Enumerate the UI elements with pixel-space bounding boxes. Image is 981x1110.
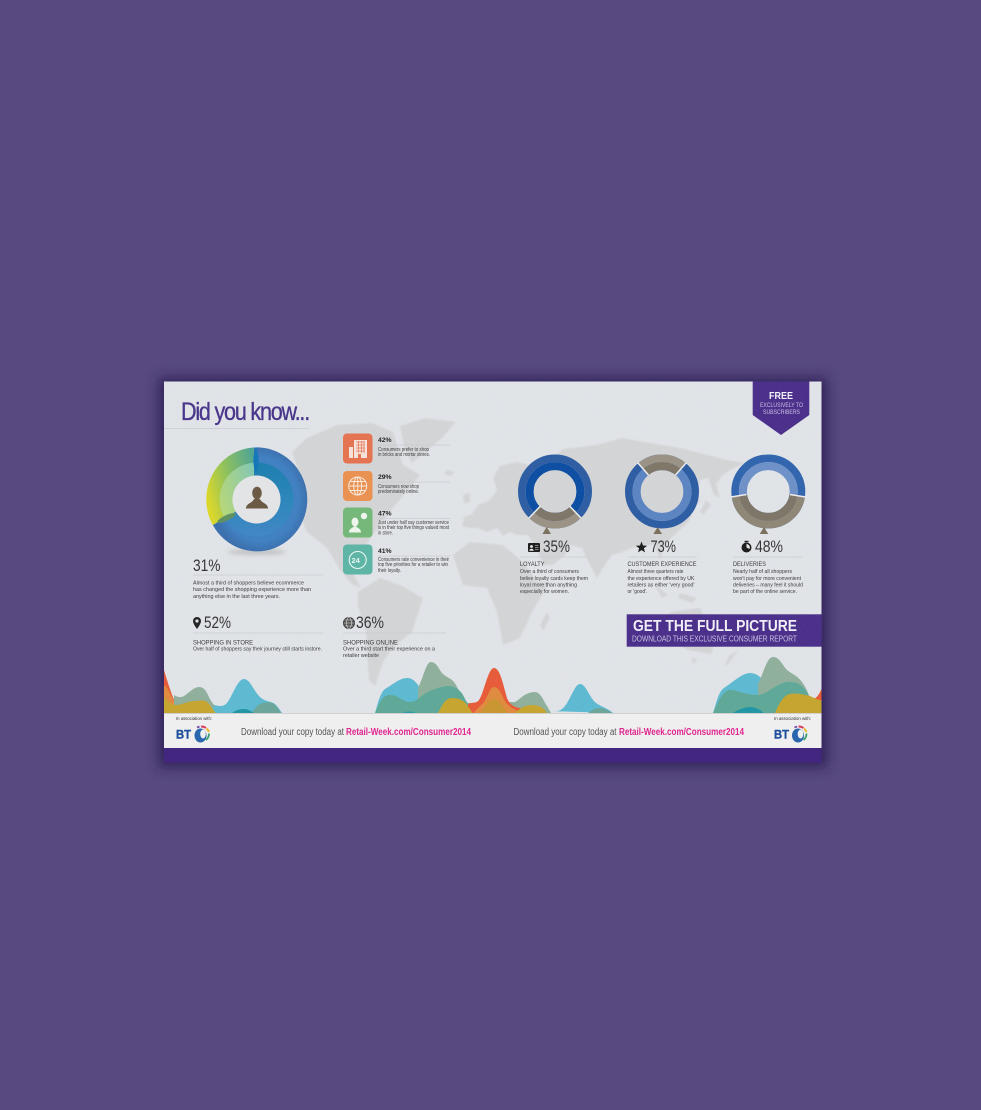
stat: 48% deliveries: deliveries – many feel it should	[733, 582, 803, 588]
download text left	[241, 727, 471, 738]
download text right: Retail-Week.com/Consumer2014	[619, 727, 744, 738]
stat: 52% shopping in store	[193, 614, 323, 653]
icon: stopwatch	[742, 541, 752, 552]
stat: 47%: Just under half say customer service	[378, 520, 449, 526]
call to action banner: GET THE FULL PICTURE	[633, 618, 797, 635]
stat: 42%: 42%	[378, 437, 392, 444]
stat: 35% loyalty: especially for women.	[520, 589, 569, 595]
stat: 52% shopping in store: 52%	[204, 614, 231, 632]
stat: 47%	[378, 510, 450, 536]
stat: 47%: in store.	[378, 530, 393, 536]
download text right: Download your copy today at	[514, 727, 617, 738]
stat: 31%: Almost a third of shoppers believe ecommerce	[193, 580, 304, 586]
donut: customer experience	[615, 445, 709, 538]
sponsor: BT right: In association with:	[774, 716, 811, 722]
free banner: FREE	[769, 390, 793, 402]
wave chart: right	[713, 657, 822, 713]
download text left: Download your copy today at	[241, 727, 344, 738]
stat: 48% deliveries: DELIVERIES	[733, 561, 766, 568]
stat: 31%: 31%	[193, 557, 221, 575]
stat: 48% deliveries: Nearly half of all shoppers	[733, 569, 792, 575]
stat: 41%: 41%	[378, 548, 392, 555]
stat: 47%: 47%	[378, 510, 392, 518]
sponsor: BT left: BT	[176, 730, 191, 742]
footer band	[164, 714, 822, 748]
icon tile: 24 hours: 24	[352, 556, 361, 565]
card shadow	[158, 377, 828, 768]
icon tile: customer service	[343, 508, 372, 538]
stat: 73% customer experience: CUSTOMER EXPERIENCE	[628, 561, 696, 568]
stat: 29%: 29%	[378, 474, 392, 481]
stat: 36% shopping online: 36%	[356, 614, 384, 632]
stat: 42%	[378, 437, 450, 458]
stat: 36% shopping online	[343, 614, 446, 659]
pointer: deliveries	[760, 527, 768, 534]
stat: 47%: is in their top five things valued most	[378, 525, 449, 531]
icon: loyalty card	[528, 543, 540, 552]
stat: 35% loyalty: 35%	[543, 538, 570, 556]
stat: 73% customer experience: or 'good'.	[628, 589, 648, 595]
icon: map pin	[193, 617, 201, 629]
sponsor: BT left	[176, 716, 212, 742]
stat: 41%: top five priorities for a retailer to win	[378, 562, 448, 568]
stat: 36% shopping online: Over a third start their experience on a	[343, 647, 435, 653]
stat: 29%: Consumers now shop	[378, 484, 419, 490]
stat: 36% shopping online: SHOPPING ONLINE	[343, 640, 398, 646]
call to action banner: DOWNLOAD THIS EXCLUSIVE CONSUMER REPORT	[632, 635, 797, 644]
stat: 31%: anything else in the last three years.	[193, 594, 280, 600]
stat: 73% customer experience: the experience offered by UK	[628, 576, 695, 582]
stat: 41%: Consumers rate convenience in their	[378, 557, 449, 563]
download text left: Retail-Week.com/Consumer2014	[346, 727, 471, 738]
title: Did you know...	[181, 398, 309, 426]
infographic card	[164, 382, 822, 762]
sponsor: BT right	[774, 716, 811, 742]
stat: 31%: has changed the shopping experience more than	[193, 587, 311, 593]
sponsor: BT right: BT	[774, 730, 789, 742]
pointer: loyalty	[542, 527, 551, 534]
stat: 73% customer experience	[628, 538, 697, 595]
pointer: customer experience	[653, 527, 662, 534]
stat: 48% deliveries	[733, 538, 803, 595]
stat: 41%: their loyalty.	[378, 568, 401, 574]
icon: star	[636, 542, 647, 552]
donut: loyalty	[508, 445, 602, 538]
stat: 41%	[378, 548, 450, 574]
free banner	[753, 382, 809, 435]
icon: person	[246, 487, 268, 508]
stat: 42%: in bricks and mortar stores.	[378, 452, 430, 458]
world map	[292, 418, 745, 686]
wave chart: centre	[375, 662, 613, 713]
free banner: EXCLUSIVELY TO	[760, 403, 803, 409]
purple base strip	[164, 748, 822, 762]
icon tile: building	[343, 434, 372, 464]
download text right	[514, 727, 744, 738]
stat: 73% customer experience: 73%	[650, 538, 676, 556]
donut: deliveries	[731, 454, 806, 529]
paper texture	[164, 382, 822, 714]
stat: 48% deliveries: be part of the online service.	[733, 589, 797, 595]
call to action banner	[627, 614, 822, 647]
stat: 29%	[378, 474, 450, 495]
wave chart: left	[164, 670, 282, 713]
stat: 42%: Consumers prefer to shop	[378, 447, 429, 453]
stat: 52% shopping in store: Over half of shoppers say their journey still starts instore.	[193, 647, 322, 653]
stat: 35% loyalty: Over a third of consumers	[520, 569, 579, 575]
icon: globe	[344, 618, 354, 628]
stat: 73% customer experience: Almost three quarters rate	[628, 569, 684, 575]
stat: 36% shopping online: retailer website	[343, 653, 379, 659]
stat: 73% customer experience: retailers as either 'very good'	[628, 582, 695, 588]
stat: 35% loyalty: belive loyalty cards keep them	[520, 576, 588, 582]
stat: 48% deliveries: won't pay for more convenient	[733, 576, 802, 582]
stat: 35% loyalty: LOYALTY	[520, 561, 544, 568]
icon tile: globe	[343, 471, 372, 501]
stat: 29%: predominately online.	[378, 489, 419, 495]
sponsor: BT left: In association with:	[176, 716, 212, 722]
stat: 31%	[193, 557, 323, 600]
main donut chart 31%	[206, 447, 307, 555]
free banner: SUBSCRIBERS	[763, 410, 800, 416]
stat: 48% deliveries: 48%	[755, 538, 783, 556]
stat: 52% shopping in store: SHOPPING IN STORE	[193, 640, 253, 646]
stat: 35% loyalty: loyal more than anything	[520, 582, 577, 588]
icon tile: 24 hours	[343, 544, 372, 574]
stat: 35% loyalty	[520, 538, 590, 595]
